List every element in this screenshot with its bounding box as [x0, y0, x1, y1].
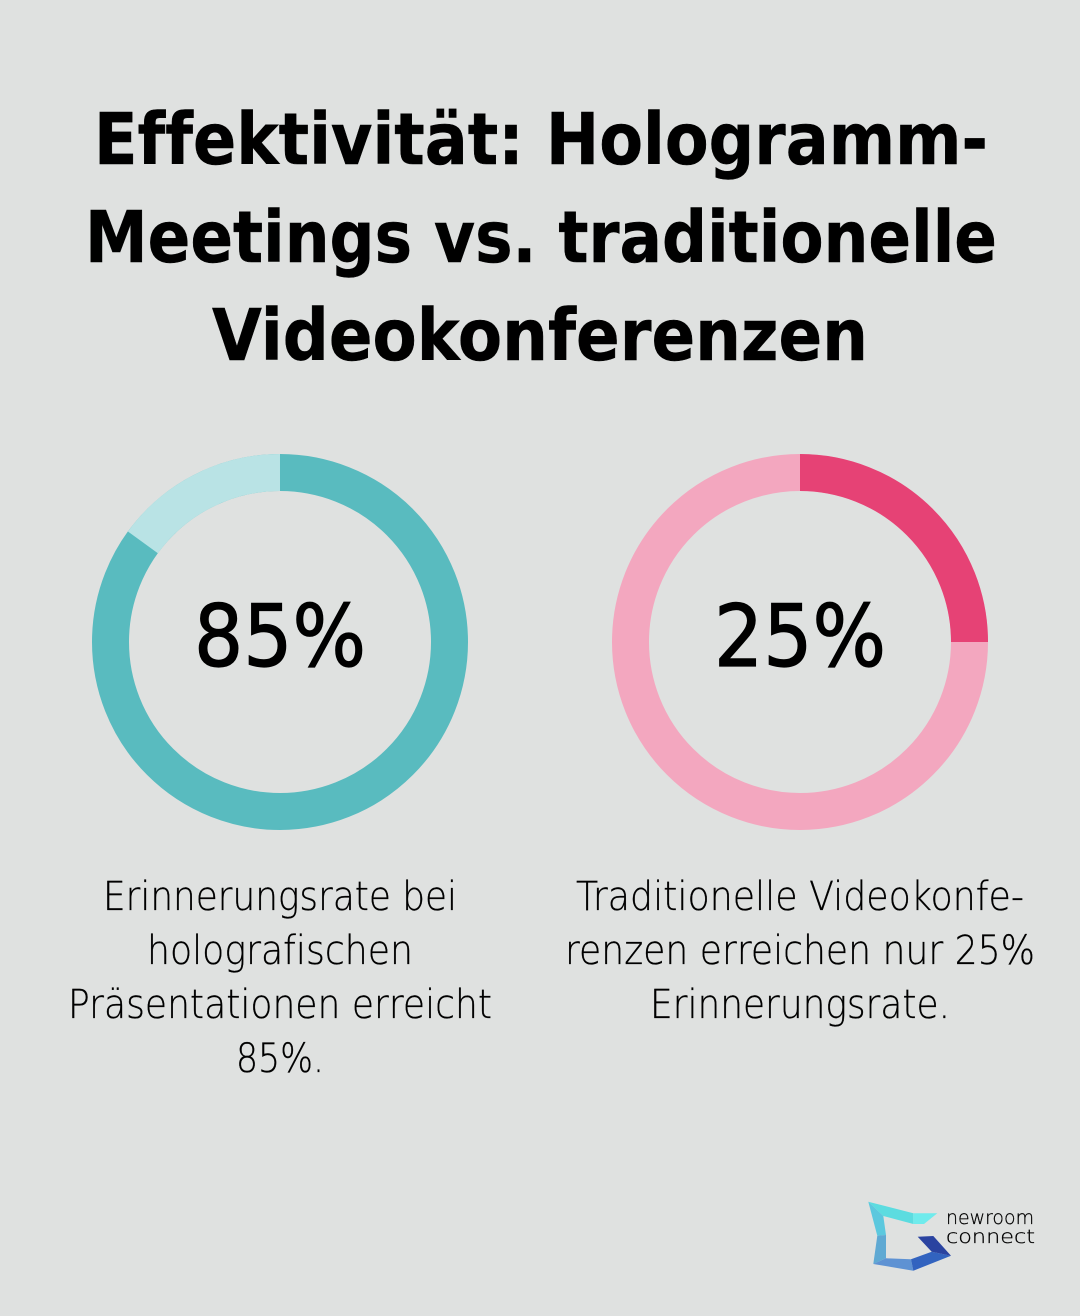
wordmark: newroom: [946, 1207, 1034, 1229]
description: video conference recall: Traditionelle Videokonfe-: [576, 874, 1024, 920]
value: 85%: 85%: [194, 587, 366, 687]
description: holographic recall: [68, 874, 492, 1082]
description: holographic recall: 85%.: [236, 1036, 324, 1082]
description: video conference recall: renzen erreichen nur 25%: [565, 928, 1035, 974]
donut chart: 85%: [110, 472, 450, 812]
value: 25%: 25%: [714, 587, 886, 687]
wordmark: [946, 1207, 1035, 1248]
logo: newroom connect: [868, 1202, 1035, 1271]
title: Effektivität: Hologramm-: [94, 98, 988, 181]
wordmark: connect: [946, 1226, 1035, 1248]
panel: traditional video conferences: [565, 472, 1035, 1028]
title: Videokonferenzen: [212, 294, 868, 377]
donut chart: 25%: [630, 472, 970, 812]
icon: logo mark: [868, 1202, 951, 1271]
description: holographic recall: Erinnerungsrate bei: [103, 874, 457, 920]
description: holographic recall: Präsentationen erreicht: [68, 982, 492, 1028]
title: [85, 98, 997, 377]
panel: holographic presentations: [68, 472, 492, 1082]
description: video conference recall: [565, 874, 1035, 1028]
description: holographic recall: holografischen: [147, 928, 413, 974]
description: video conference recall: Erinnerungsrate.: [650, 982, 950, 1028]
